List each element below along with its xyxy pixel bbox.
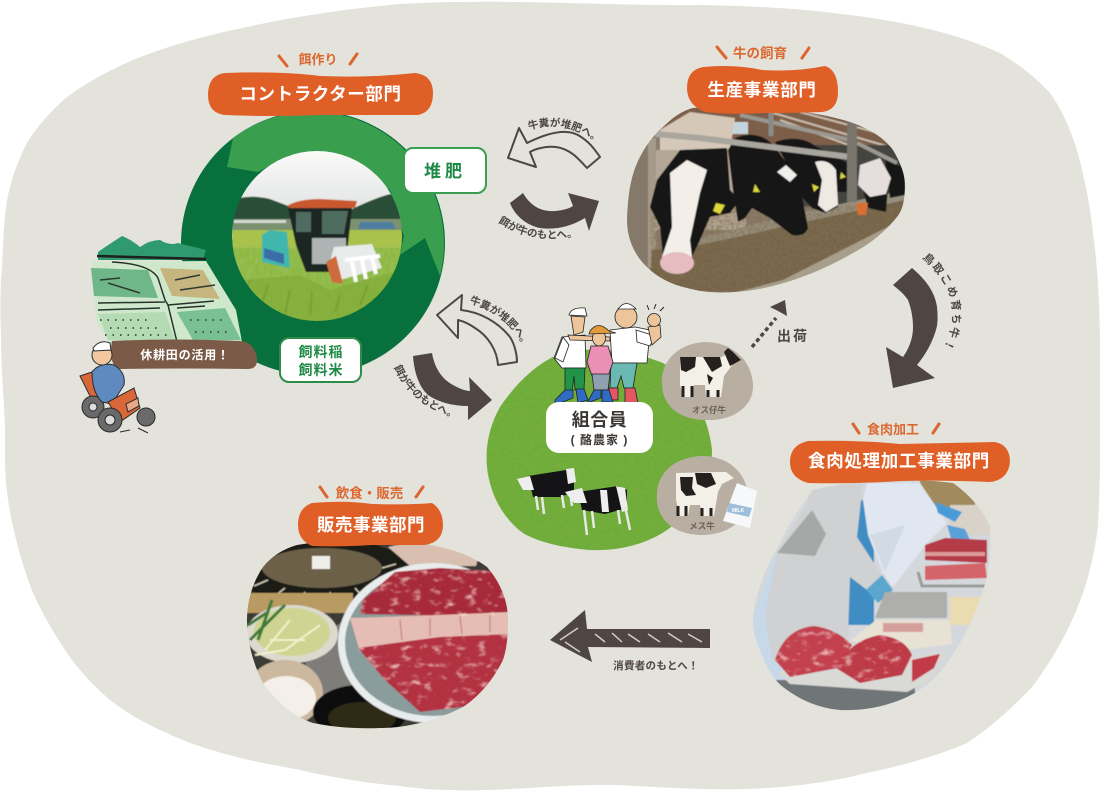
banner: fallow field use: 休耕田の活用！: [140, 347, 230, 362]
photo: rice harvester: [230, 150, 405, 322]
panel: meat processing division: [750, 422, 1010, 713]
banner: fallow field use: [111, 340, 257, 369]
banner: contractor: コントラクター部門: [239, 84, 402, 104]
tagline: food and sales: 飲食・販売: [336, 485, 404, 501]
icon: bull calf: [680, 348, 741, 397]
cow 4: [885, 160, 905, 198]
banner: production: [687, 66, 838, 114]
arrow: feed to cattle top: [498, 193, 599, 239]
badge: bull calf: [662, 342, 753, 420]
tagline: cattle rearing: [717, 45, 809, 61]
label: feed rice: 飼料米: [298, 362, 344, 378]
label: members: [546, 402, 653, 453]
tagline: cattle rearing: 牛の飼育: [733, 45, 787, 61]
tagline: meat processing: 食肉加工: [867, 422, 919, 437]
tagline: feed production: 餌作り: [298, 52, 338, 67]
feed ring: [181, 111, 445, 375]
arrow: Tottori rice-raised beef: [886, 253, 962, 388]
illustration: fallow field: [91, 236, 242, 345]
tagline: meat processing: [853, 422, 939, 437]
cow 1: [650, 148, 740, 257]
badge: dairy cow: [657, 456, 748, 535]
label: compost: [404, 148, 486, 193]
arrow: manure to compost top: [507, 118, 601, 169]
label: feed rice: 飼料稲: [298, 344, 344, 360]
banner: meat processing: 食肉処理加工事業部門: [808, 451, 990, 471]
label: members: ( 酪農家 ): [571, 432, 628, 447]
panel: sales division: [247, 485, 508, 728]
arrow: to consumers: 消費者のもとへ！: [613, 659, 699, 672]
label: feed rice: [280, 338, 361, 382]
icon: milk carton: [723, 483, 757, 528]
illustration: farmer on tractor: [80, 342, 155, 433]
illustration: dairy farmers: [554, 304, 664, 405]
farmer left: [554, 308, 610, 405]
arrow: manure to compost lower: [436, 294, 523, 366]
arrow: shipping: 出荷: [777, 328, 809, 344]
banner: production: 生産事業部門: [707, 80, 817, 100]
panel: production division: [625, 45, 910, 295]
cow 3: [775, 139, 858, 213]
banner: sales: 販売事業部門: [317, 515, 425, 535]
arrow: manure to compost lower: 牛糞が堆肥へ。: [470, 295, 523, 342]
arrow caption: 牛糞が堆肥へ。: [528, 118, 594, 140]
label: compost: 堆肥: [424, 162, 466, 181]
badge: dairy cow: メス牛: [689, 521, 715, 531]
calf right: [565, 486, 630, 535]
tagline: food and sales: [320, 485, 423, 501]
arrow: to consumers: [550, 610, 710, 672]
banner: meat processing: [790, 441, 1010, 483]
farmer centre: [587, 326, 616, 403]
farmer right: [609, 304, 661, 403]
tagline: feed production: [279, 52, 357, 67]
photo: cows in barn: [625, 100, 910, 295]
banner: contractor: [208, 72, 433, 116]
photo: yakiniku meal: [247, 544, 508, 728]
badge: bull calf: オス仔牛: [692, 405, 726, 415]
banner: sales: [298, 502, 443, 546]
panel: cooperative members: [480, 304, 720, 555]
icon: milk carton: MILK: [732, 508, 745, 514]
arrow: shipping: [752, 300, 809, 347]
panel: contractor division: [181, 52, 486, 382]
arrow: feed to cattle top: 餌が牛のもとへ。: [498, 216, 571, 239]
arrow: feed to cooperative lower: 餌が牛のもとへ。: [394, 364, 450, 416]
calf left: [517, 468, 576, 514]
photo: pasture with calves: [486, 350, 712, 550]
arrow: Tottori rice-raised beef: 鳥取こめ育ち牛！: [922, 253, 962, 348]
label: members: 組合員: [572, 410, 627, 430]
icon: dairy cow: [676, 472, 734, 516]
photo: meat plant: [750, 478, 995, 713]
arrow: feed to cooperative lower: [394, 353, 492, 420]
cow 2: [728, 135, 808, 235]
